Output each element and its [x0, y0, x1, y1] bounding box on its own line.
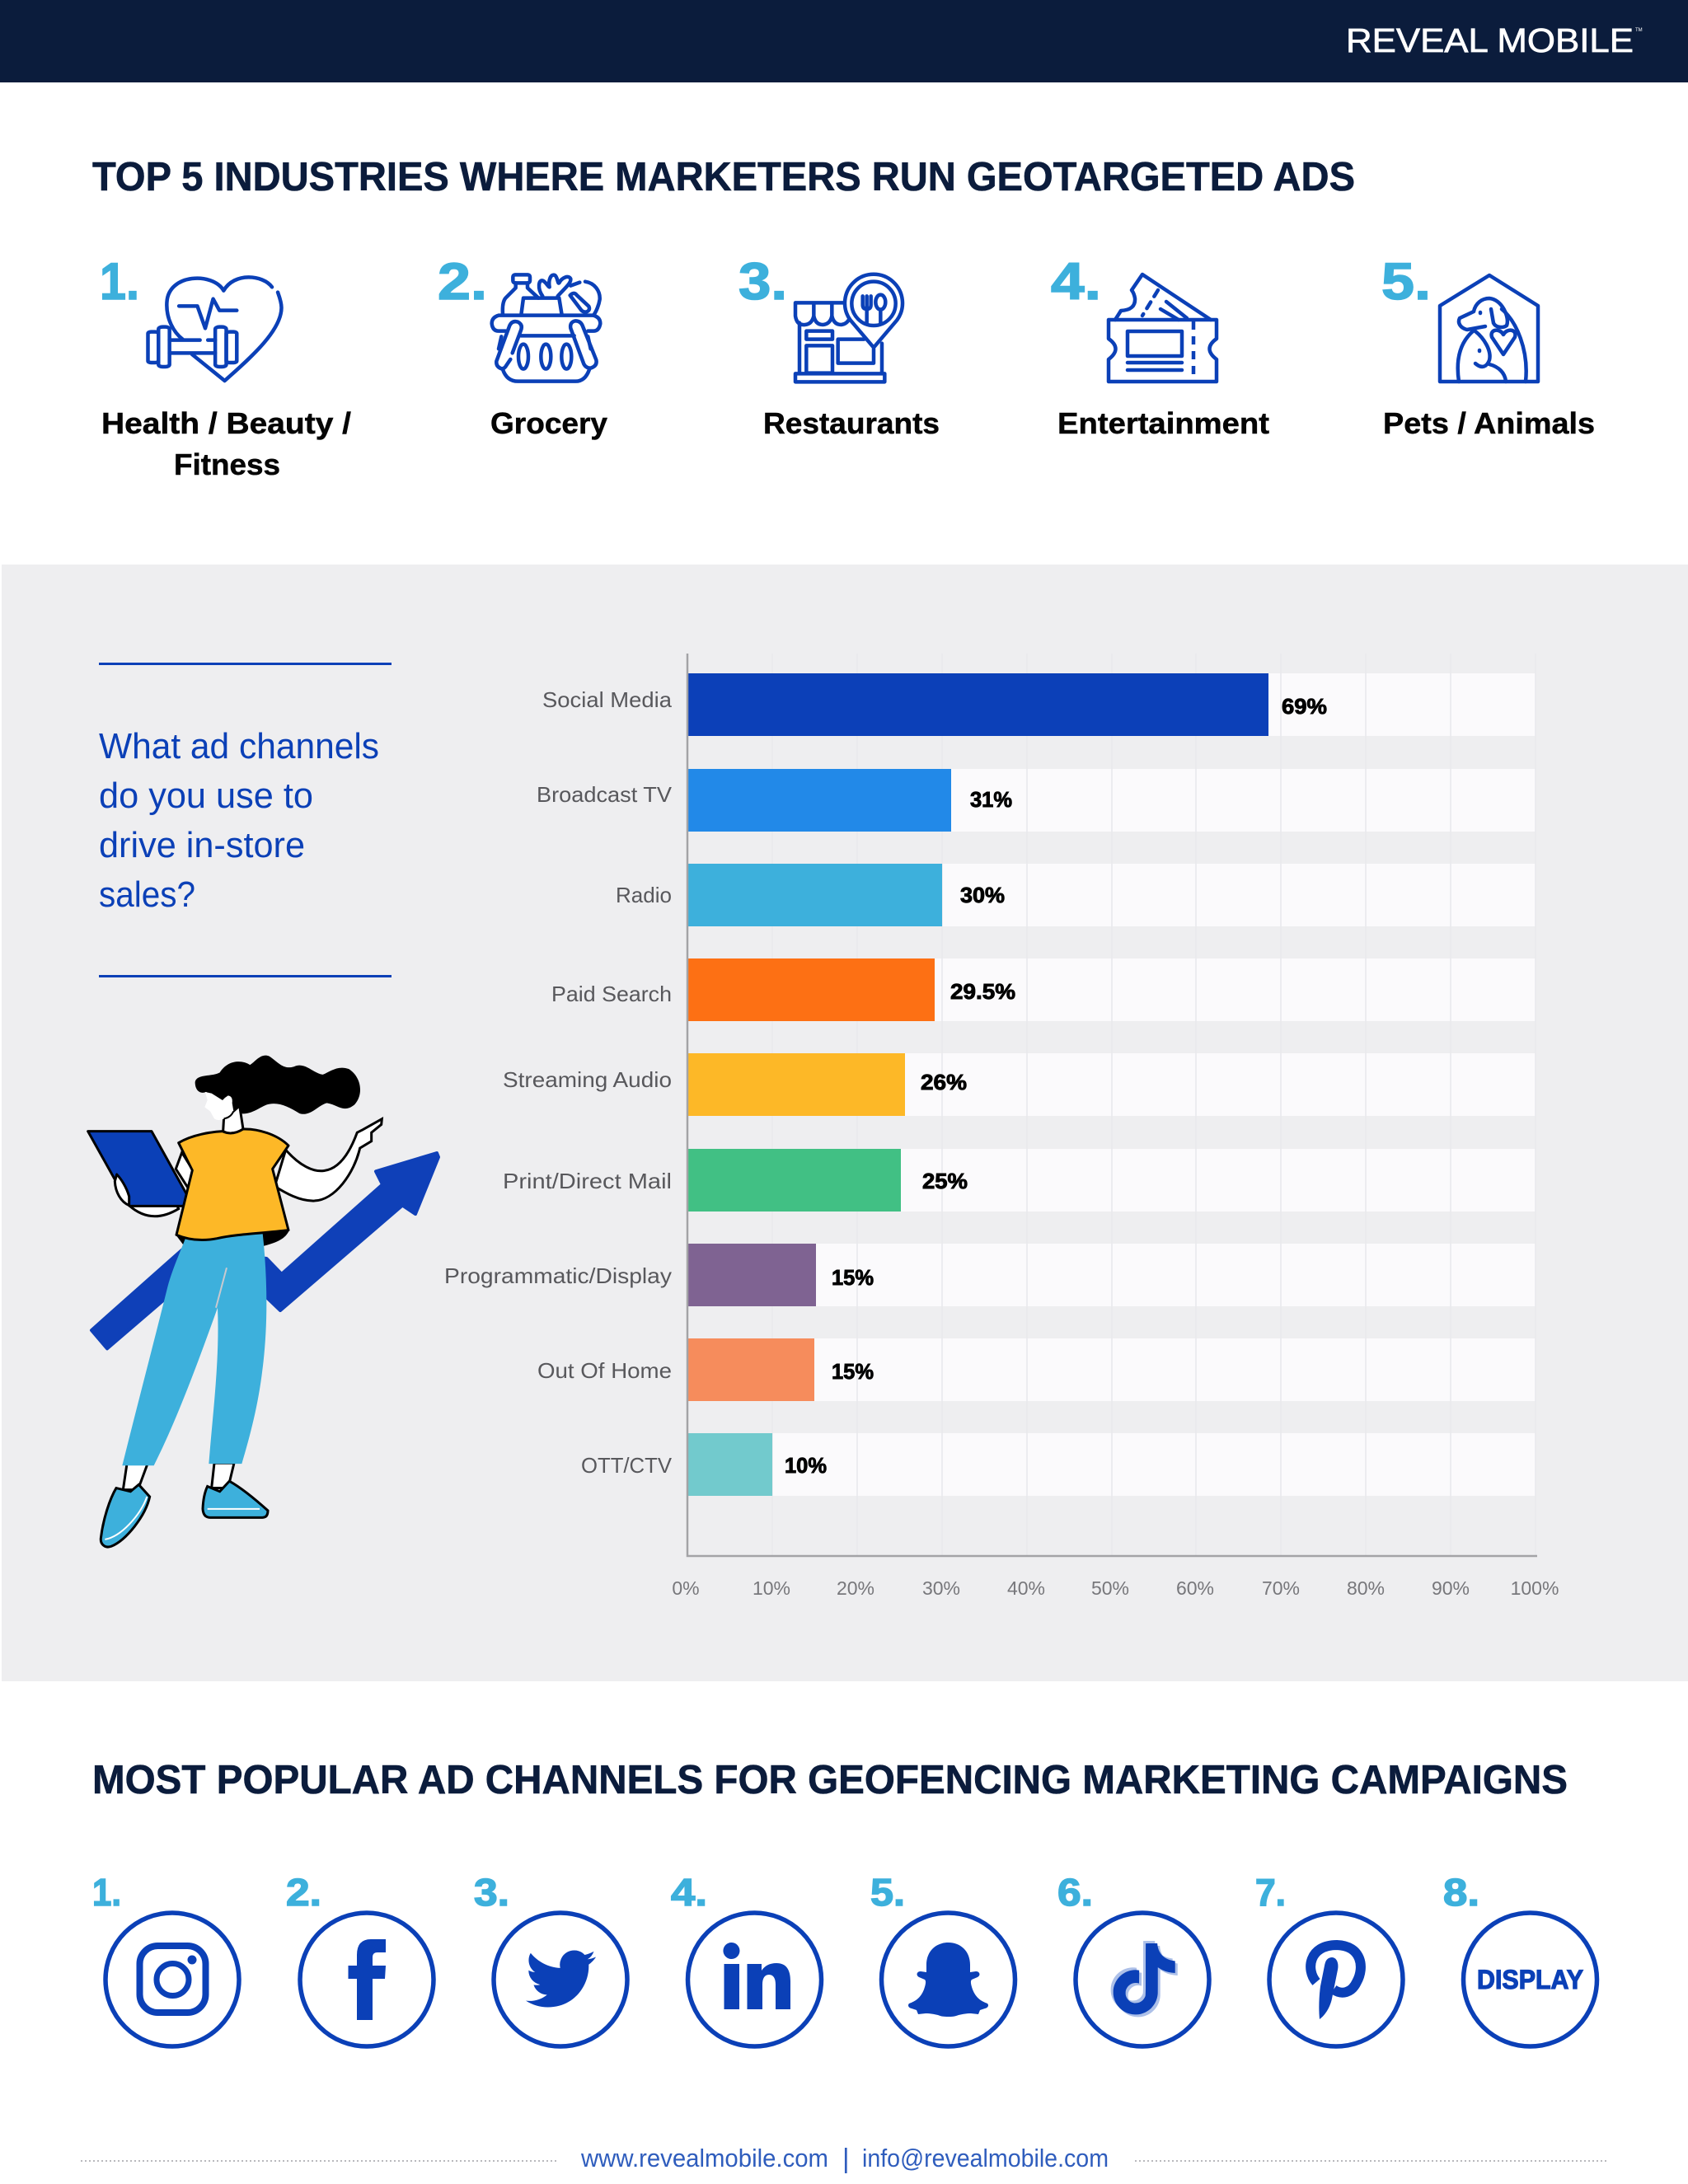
- icon: instagram: [140, 1946, 206, 2013]
- value labels: 31%: [970, 787, 1012, 812]
- item 1: health beauty fitness: 1.: [100, 253, 139, 311]
- icon: facebook: [348, 1939, 386, 2020]
- footer: contact links: www.revealmobile.com: [580, 2144, 828, 2172]
- icon: tiktok: [1111, 1941, 1178, 2017]
- category labels: Broadcast TV: [537, 782, 673, 807]
- channel 2: facebook: 2.: [286, 1871, 321, 1914]
- icon: restaurant with pin: [795, 274, 903, 382]
- survey question: drive in-store: [99, 825, 305, 865]
- axis ticks: 10%: [753, 1577, 790, 1599]
- value labels: 30%: [960, 883, 1005, 907]
- icon: twitter: [526, 1950, 596, 2008]
- item 1: health beauty fitness: [100, 253, 351, 481]
- category labels: [444, 687, 673, 1478]
- value labels: 26%: [921, 1070, 967, 1094]
- survey question: What ad channels: [99, 726, 379, 766]
- icon: display label: DISPLAY: [1477, 1965, 1583, 1994]
- item 4: entertainment: 4.: [1051, 253, 1101, 311]
- upper body: [88, 1092, 288, 1240]
- item 1: health beauty fitness: Fitness: [174, 448, 280, 481]
- axis ticks: 100%: [1511, 1577, 1559, 1599]
- item 5: pets / animals: 5.: [1381, 253, 1431, 311]
- channel 4: linkedin: [671, 1871, 821, 2046]
- value labels: 15%: [832, 1359, 874, 1384]
- lower body and arrow: [91, 1056, 438, 1547]
- channel 2: facebook: [286, 1871, 434, 2046]
- header bar: [0, 0, 1688, 82]
- icon: grocery basket: [492, 274, 600, 382]
- item 3: restaurants: 3.: [738, 253, 787, 311]
- channel 6: tiktok: [1057, 1871, 1209, 2046]
- category labels: Programmatic/Display: [444, 1263, 672, 1288]
- item 3: restaurants: Restaurants: [763, 406, 940, 440]
- item 2: grocery: [438, 253, 607, 440]
- channel 4: linkedin: 4.: [671, 1871, 707, 1914]
- channel 7: pinterest: [1255, 1871, 1403, 2046]
- axis ticks: 50%: [1091, 1577, 1129, 1599]
- item 4: entertainment: [1051, 253, 1269, 440]
- item 3: restaurants: [738, 253, 940, 440]
- axis ticks: [672, 1577, 1559, 1599]
- item 5: pets / animals: Pets / Animals: [1383, 406, 1595, 440]
- icon: linkedin: [723, 1943, 790, 2009]
- category labels: Radio: [616, 883, 672, 907]
- axis ticks: 90%: [1432, 1577, 1470, 1599]
- channel 5: snapchat: 5.: [870, 1871, 905, 1914]
- axes: [687, 654, 1537, 1556]
- survey question: do you use to: [99, 776, 313, 816]
- panel: ranked ad channels: [92, 1871, 1597, 2046]
- logo: Reveal Mobile: TM: [1635, 28, 1643, 33]
- axis ticks: 60%: [1176, 1577, 1214, 1599]
- channel 6: tiktok: 6.: [1057, 1871, 1093, 1914]
- item 2: grocery: 2.: [438, 253, 487, 311]
- survey question: [99, 663, 392, 977]
- icon: tickets: [1109, 274, 1217, 382]
- value labels: 25%: [922, 1169, 968, 1193]
- item 1: health beauty fitness: Health / Beauty /: [101, 406, 351, 440]
- panel: ad channels survey: [2, 565, 1688, 1681]
- panel: top 5 industries list: [100, 253, 1595, 481]
- illustration: woman with tablet and rising arrow: [88, 1056, 438, 1547]
- category labels: Out Of Home: [537, 1358, 672, 1383]
- heading: most popular ad channels: MOST POPULAR AD CHANNELS FOR GEOFENCING MARKETING CAMPAIGNS: [92, 1758, 1568, 1802]
- value labels: 29.5%: [950, 979, 1015, 1004]
- icon: pinterest: [1311, 1945, 1361, 2019]
- icon: heart with dumbbell: [148, 277, 281, 381]
- icon: snapchat: [908, 1943, 988, 2017]
- axis ticks: 0%: [672, 1577, 700, 1599]
- channel 1: instagram: [92, 1871, 239, 2046]
- footer: contact links: info@revealmobile.com: [862, 2144, 1109, 2172]
- category labels: OTT/CTV: [581, 1453, 673, 1478]
- footer: contact links: |: [842, 2143, 850, 2173]
- icon: pets in house: [1440, 275, 1538, 382]
- value labels: 15%: [832, 1265, 874, 1290]
- axis ticks: 30%: [922, 1577, 960, 1599]
- category labels: Paid Search: [551, 982, 672, 1006]
- item 5: pets / animals: [1381, 253, 1595, 440]
- axis ticks: 40%: [1007, 1577, 1045, 1599]
- item 4: entertainment: Entertainment: [1057, 406, 1269, 440]
- channel 3: twitter: [474, 1871, 627, 2046]
- heading: top 5 industries: TOP 5 INDUSTRIES WHERE MARKETERS RUN GEOTARGETED ADS: [92, 155, 1355, 199]
- channel 8: display: 8.: [1443, 1871, 1479, 1914]
- value labels: 10%: [785, 1453, 827, 1478]
- value labels: 69%: [1282, 694, 1327, 719]
- channel 7: pinterest: 7.: [1255, 1871, 1286, 1914]
- logo: Reveal Mobile: REVEAL MOBILE: [1346, 21, 1634, 59]
- item 2: grocery: Grocery: [490, 406, 607, 440]
- survey question: sales?: [99, 874, 195, 915]
- axis ticks: 70%: [1262, 1577, 1300, 1599]
- channel 5: snapchat: [870, 1871, 1015, 2046]
- footer: contact links: [81, 2143, 1609, 2173]
- channel 3: twitter: 3.: [474, 1871, 509, 1914]
- axis ticks: 20%: [837, 1577, 874, 1599]
- bar tracks: [687, 673, 1536, 1496]
- channel 1: instagram: 1.: [92, 1871, 121, 1914]
- category labels: Streaming Audio: [503, 1067, 672, 1092]
- category labels: Social Media: [542, 687, 673, 712]
- bar chart: ad channels: [444, 654, 1559, 1599]
- value labels: [785, 694, 1327, 1478]
- bars: [687, 673, 1268, 1496]
- axis ticks: 80%: [1347, 1577, 1385, 1599]
- channel 8: display: [1443, 1871, 1597, 2046]
- category labels: Print/Direct Mail: [503, 1169, 672, 1193]
